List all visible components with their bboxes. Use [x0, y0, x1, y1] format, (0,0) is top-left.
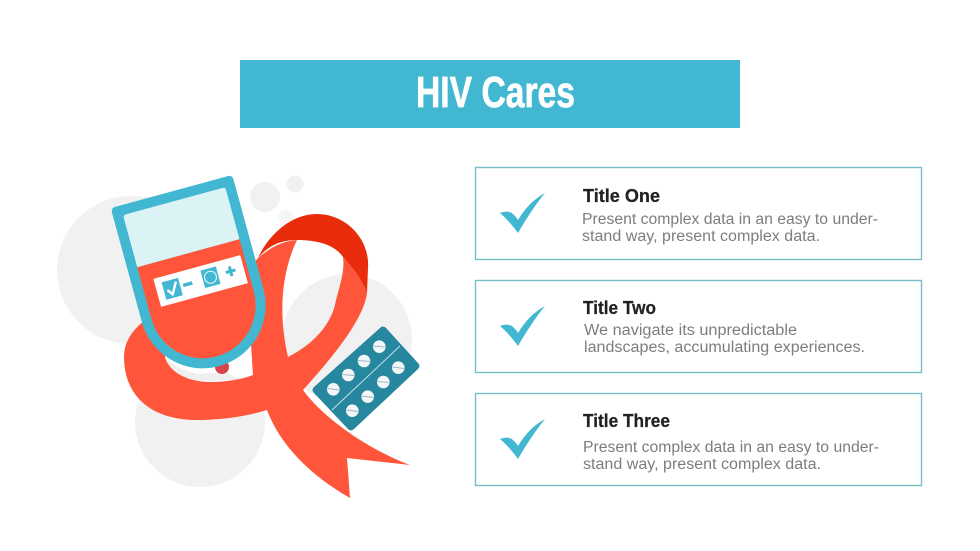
title banner [240, 60, 740, 128]
icon: plus [224, 265, 237, 277]
text: description one [582, 211, 878, 245]
icon: minus [183, 281, 193, 287]
text: description three: stand way, present complex data. [583, 456, 821, 473]
panel: title one [476, 168, 922, 260]
panel: title three [476, 394, 922, 486]
bag empty section [123, 187, 240, 267]
ribbon front [124, 240, 410, 498]
icon: check mark two [500, 306, 545, 346]
text: description one: Present complex data in an easy to under- [582, 211, 878, 228]
background circles [57, 176, 412, 487]
pill blister pack [312, 326, 420, 430]
icon: check mark three [500, 419, 545, 459]
panel: title two [476, 280, 922, 372]
heading: title two: Title Two [583, 298, 656, 318]
heading: title one: Title One [583, 186, 660, 206]
bag label [153, 255, 248, 307]
icon: checkbox [162, 278, 183, 300]
icon: check mark one [500, 193, 545, 233]
text: description two: We navigate its unpredictable [584, 322, 797, 339]
text: description three [583, 439, 879, 473]
text: description three: Present complex data in an easy to under- [583, 439, 879, 456]
blood fill [137, 239, 268, 370]
illustration: ribbon, blood bag and pills [57, 175, 420, 498]
blood bag [111, 175, 280, 383]
text: description two: landscapes, accumulating experiences. [584, 339, 865, 356]
icon: circle box [200, 266, 221, 288]
bag outline [111, 175, 280, 383]
text: description two [584, 322, 865, 356]
ribbon back fold [258, 214, 368, 293]
text: description one: stand way, present complex data. [582, 228, 820, 245]
heading: title three: Title Three [583, 411, 670, 431]
title banner: HIV Cares [416, 68, 575, 117]
tube base under bag [165, 330, 254, 383]
